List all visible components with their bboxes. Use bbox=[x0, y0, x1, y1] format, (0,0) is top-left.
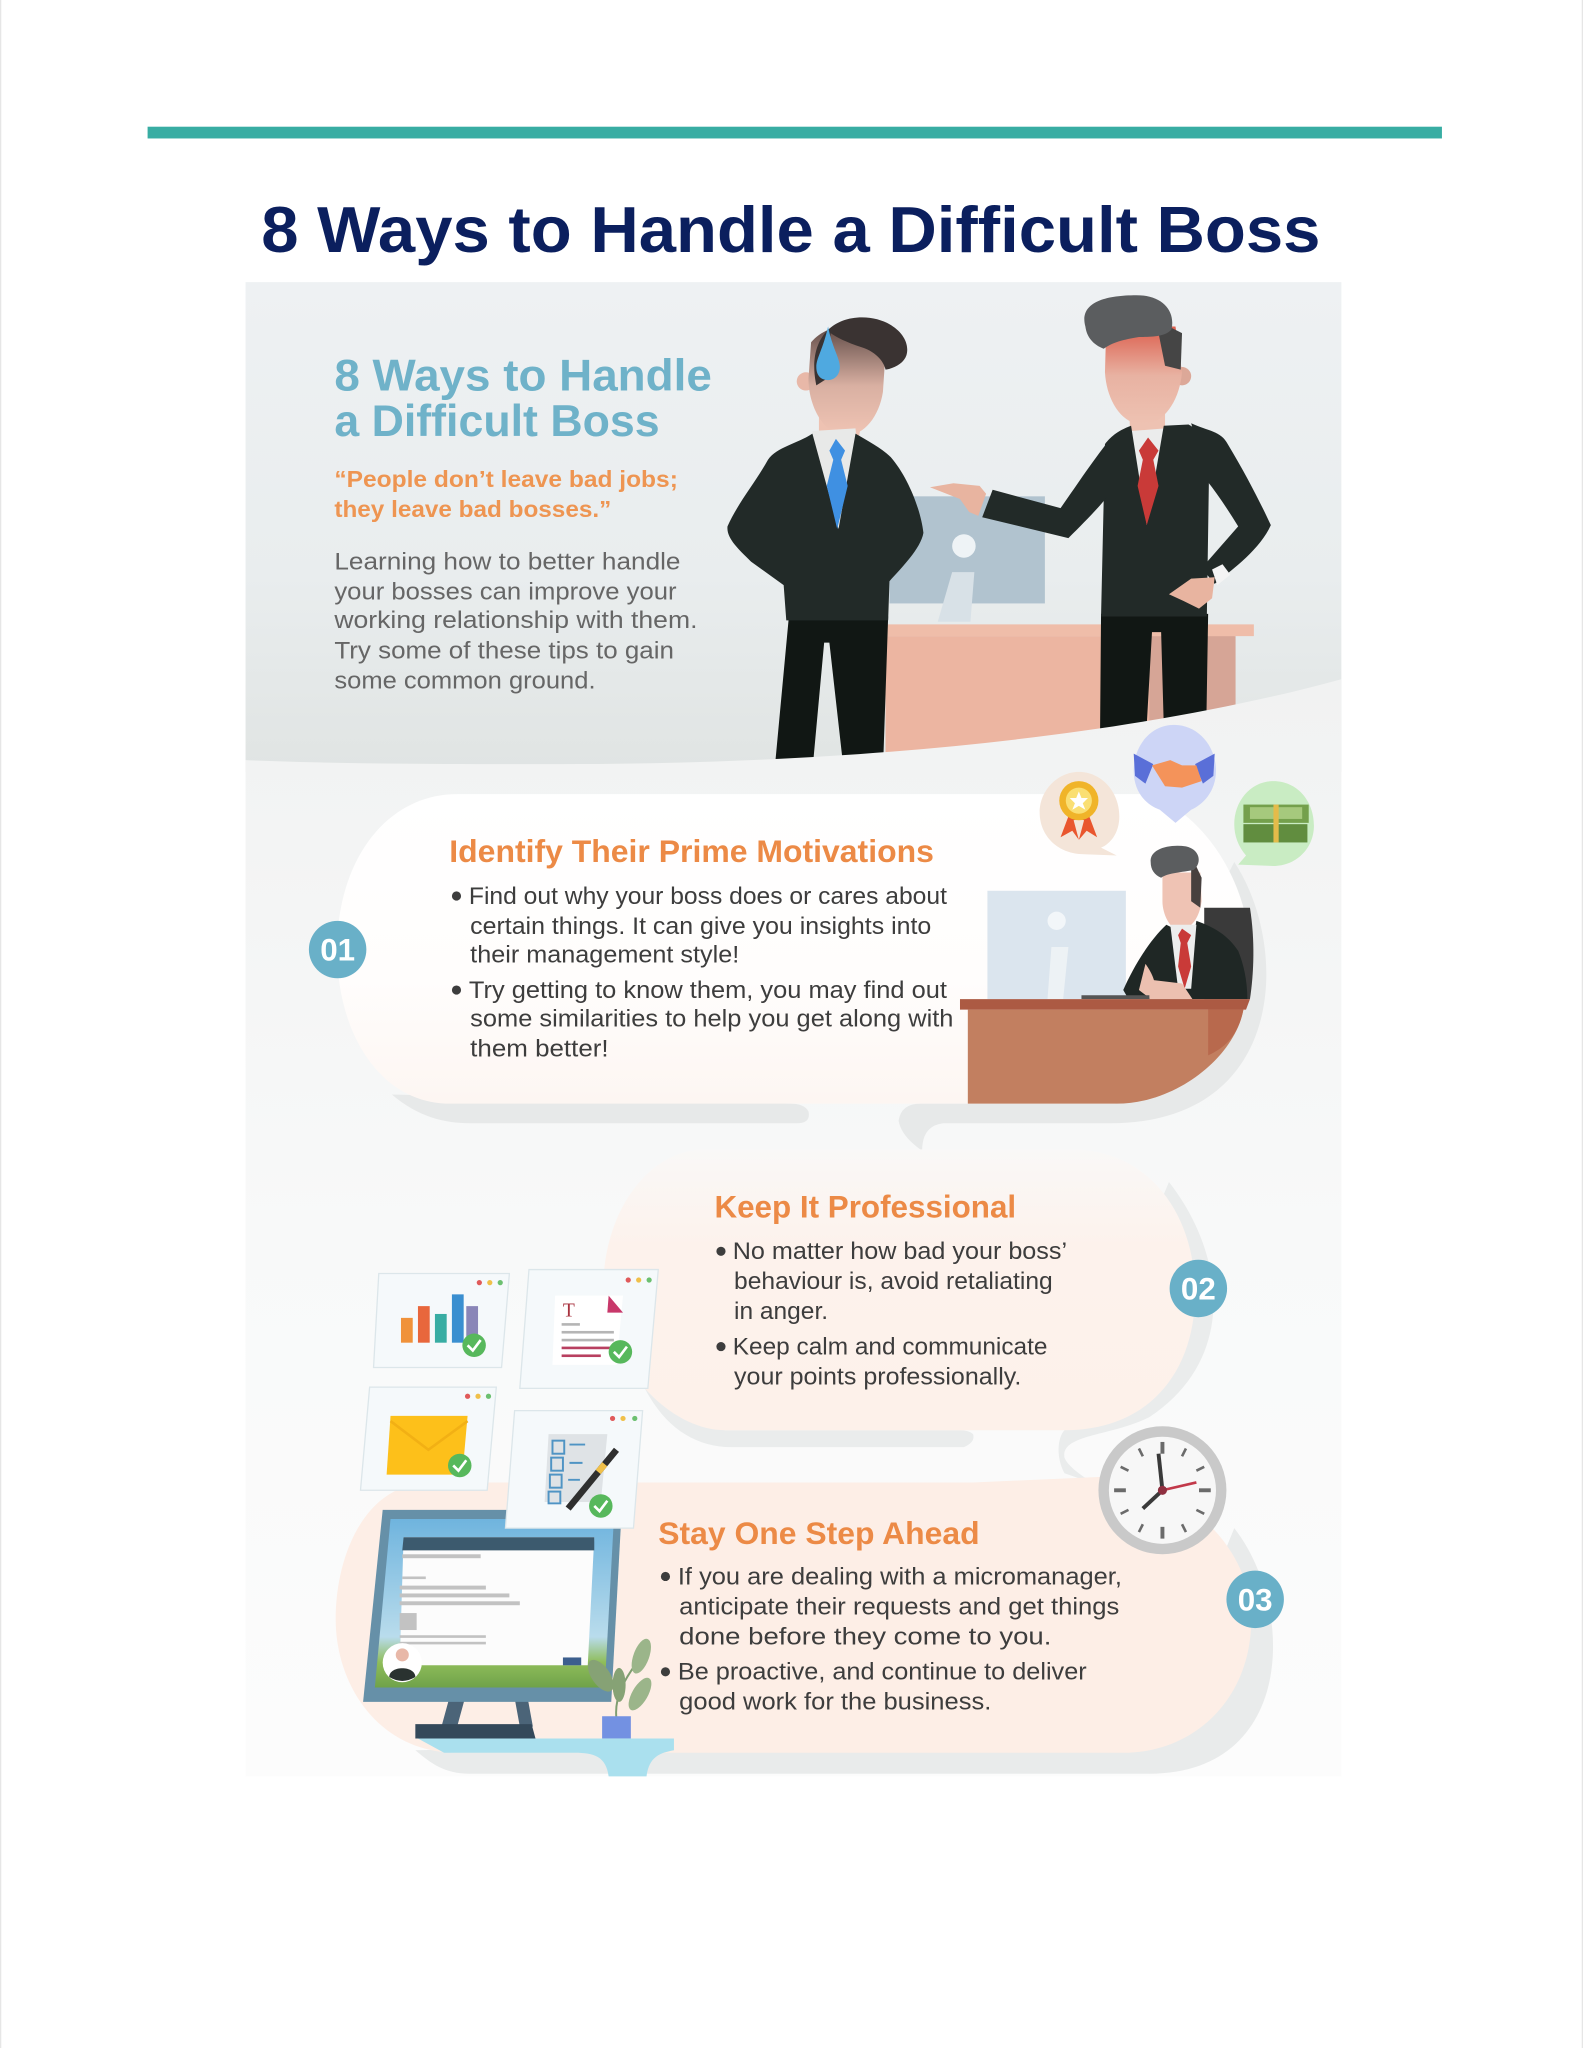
intro paragraph: Learning how to better handle bbox=[334, 548, 680, 575]
tip 2 bullets: in anger. bbox=[734, 1298, 828, 1325]
panel: tip 3 bbox=[336, 1476, 1284, 1774]
tip 3 bullets bbox=[661, 1563, 1122, 1716]
icon: money bubble bbox=[1234, 781, 1314, 866]
intro paragraph: some common ground. bbox=[334, 667, 596, 694]
tip 1 bullets: Try getting to know them, you may find out bbox=[469, 977, 947, 1004]
number badge 01 bbox=[309, 921, 366, 978]
number badge 03: 03 bbox=[1238, 1582, 1273, 1617]
hair bbox=[814, 317, 907, 385]
hand on hip bbox=[1169, 577, 1215, 609]
panel: header background bbox=[246, 282, 1341, 772]
illustration: plant bbox=[583, 1636, 656, 1738]
number badge 02: 02 bbox=[1181, 1272, 1216, 1307]
shirt bbox=[1123, 428, 1169, 522]
shirt cuff bbox=[1212, 564, 1230, 585]
back hair bbox=[1156, 320, 1182, 370]
panel: tip 2 bbox=[603, 1149, 1227, 1484]
number badge 02 bbox=[1170, 1260, 1227, 1317]
number badge 01: 01 bbox=[320, 933, 355, 968]
tip 1 bullets: Find out why your boss does or cares about bbox=[469, 883, 947, 910]
illustration: stressed employee bbox=[727, 317, 923, 771]
tip 1 bullets: their management style! bbox=[470, 942, 739, 969]
intro paragraph: Try some of these tips to gain bbox=[334, 637, 674, 664]
tip 3 heading: Stay One Step Ahead bbox=[658, 1516, 980, 1551]
icon: clock bbox=[1098, 1426, 1226, 1554]
pointing hand bbox=[930, 483, 986, 516]
page title: 8 Ways to Handle a Difficult Boss bbox=[261, 193, 1320, 266]
tip 2 heading: Keep It Professional bbox=[714, 1189, 1016, 1224]
tip 1 bullets bbox=[452, 883, 953, 1063]
arm on hip bbox=[1191, 423, 1271, 584]
quote: “People don’t leave bad jobs; bbox=[334, 466, 678, 492]
intro paragraph bbox=[333, 548, 697, 694]
app window: document bbox=[520, 1270, 658, 1388]
tip 3 bullets: Be proactive, and continue to deliver bbox=[678, 1659, 1087, 1686]
trousers bbox=[1100, 614, 1208, 771]
tip 1 heading: Identify Their Prime Motivations bbox=[449, 834, 934, 869]
panel: body background with curved top bbox=[246, 679, 1341, 1776]
tip 1 bullets: them better! bbox=[470, 1036, 609, 1063]
trousers bbox=[775, 616, 888, 771]
tip 2 bullets: No matter how bad your boss’ bbox=[733, 1238, 1067, 1265]
header text block bbox=[333, 352, 712, 694]
illustration: monitor behind figures bbox=[889, 496, 1045, 622]
tip 2 bullets: behaviour is, avoid retaliating bbox=[734, 1268, 1053, 1295]
shirt bbox=[812, 428, 865, 522]
intro paragraph: your bosses can improve your bbox=[334, 579, 677, 606]
illustration: boss at desk bbox=[960, 846, 1253, 1104]
tip 3 bullets: good work for the business. bbox=[679, 1689, 991, 1716]
icon: handshake bubble bbox=[1134, 725, 1216, 823]
tip 2 bullets: your points professionally. bbox=[734, 1363, 1021, 1390]
tip 1 bullets: certain things. It can give you insights into bbox=[470, 913, 931, 940]
tip 1 bullets: some similarities to help you get along with bbox=[470, 1006, 953, 1033]
illustration: desktop monitor bbox=[363, 1510, 622, 1738]
app window: checklist bbox=[505, 1411, 643, 1528]
quote: they leave bad bosses.” bbox=[334, 496, 611, 522]
header heading: 8 Ways to Handle bbox=[334, 352, 712, 401]
app window: email bbox=[360, 1387, 496, 1490]
jacket bbox=[727, 434, 923, 620]
illustration: desk bbox=[886, 624, 1254, 784]
app window: document: T bbox=[563, 1301, 575, 1322]
header heading: a Difficult Boss bbox=[334, 397, 660, 446]
tip 3 bullets: anticipate their requests and get things bbox=[679, 1593, 1119, 1620]
pointing arm bbox=[982, 439, 1110, 538]
card body bbox=[337, 794, 1250, 1104]
jacket body bbox=[1101, 424, 1209, 616]
header heading bbox=[334, 352, 712, 446]
icon: medal bubble bbox=[1040, 772, 1119, 856]
card body bbox=[336, 1476, 1251, 1753]
tip 3 bullets: done before they come to you. bbox=[679, 1623, 1051, 1650]
card shadow bbox=[392, 862, 1266, 1151]
card shadow bbox=[415, 1528, 1273, 1774]
tip 3 bullets: If you are dealing with a micromanager, bbox=[678, 1563, 1122, 1590]
top teal rule bbox=[148, 127, 1442, 138]
quote bbox=[334, 466, 678, 522]
sweat drop bbox=[816, 327, 840, 380]
tip 2 bullets: Keep calm and communicate bbox=[733, 1333, 1047, 1360]
neck and face bbox=[1128, 398, 1165, 451]
app window: chart bbox=[374, 1273, 509, 1368]
number badge 03 bbox=[1226, 1571, 1284, 1628]
panel: tip 1 bbox=[309, 725, 1314, 1151]
card body bbox=[603, 1149, 1195, 1430]
front hair bbox=[1084, 295, 1172, 349]
blue tie bbox=[827, 439, 848, 529]
intro paragraph: working relationship with them. bbox=[333, 607, 697, 634]
tip 2 bullets bbox=[716, 1238, 1067, 1390]
illustration: angry boss bbox=[930, 295, 1271, 771]
neck and face bbox=[819, 392, 862, 451]
illustration: shelf bbox=[418, 1738, 674, 1776]
red tie bbox=[1138, 438, 1159, 525]
card shadow bbox=[640, 1182, 1214, 1484]
